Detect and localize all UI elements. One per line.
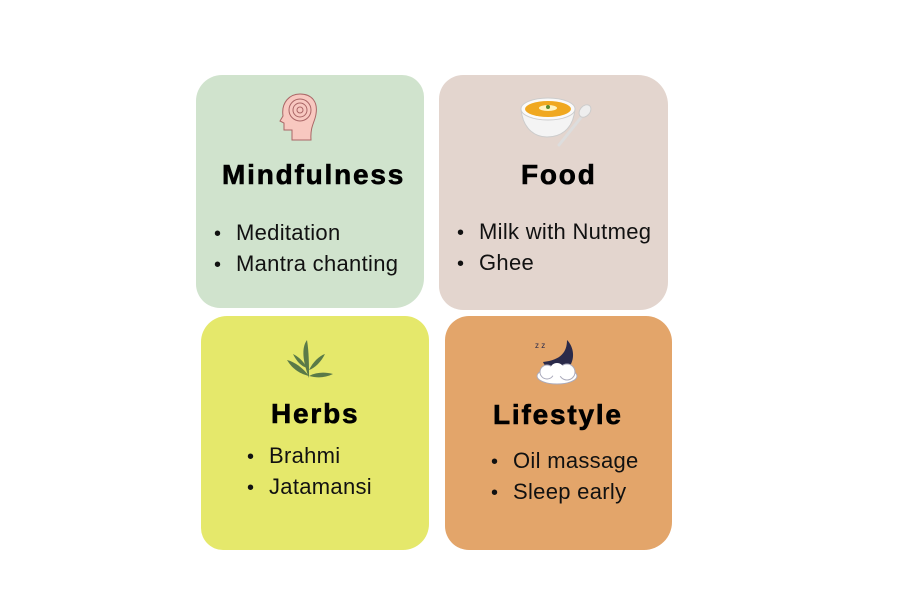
icon: moon on cloud: z z <box>535 341 545 350</box>
panel: food <box>439 75 668 310</box>
heading: Mindfulness: Mindfulness <box>222 159 405 190</box>
icon: leaves <box>287 340 333 378</box>
list: mindfulness items <box>214 220 398 276</box>
icon: soup bowl <box>520 98 592 146</box>
list: food items <box>458 219 651 275</box>
icon: moon on cloud <box>535 340 578 384</box>
list: herb items: Brahmi <box>269 443 340 468</box>
heading: Herbs: Herbs <box>271 398 359 429</box>
heading: Food: Food <box>521 159 597 190</box>
list: lifestyle items: Oil massage <box>513 448 639 473</box>
list: mindfulness items: Meditation <box>236 220 341 245</box>
list: mindfulness items: Mantra chanting <box>236 251 398 276</box>
list: lifestyle items: Sleep early <box>513 479 626 504</box>
list: lifestyle items <box>492 448 639 504</box>
list: herb items <box>248 443 372 499</box>
heading: Lifestyle: Lifestyle <box>493 399 623 430</box>
list: herb items: Jatamansi <box>269 474 372 499</box>
panel: herbs <box>201 316 429 550</box>
panel: lifestyle <box>445 316 672 550</box>
icon: head spiral <box>279 94 317 140</box>
list: food items: Ghee <box>479 250 534 275</box>
list: food items: Milk with Nutmeg <box>479 219 651 244</box>
panel: mindfulness <box>196 75 424 308</box>
